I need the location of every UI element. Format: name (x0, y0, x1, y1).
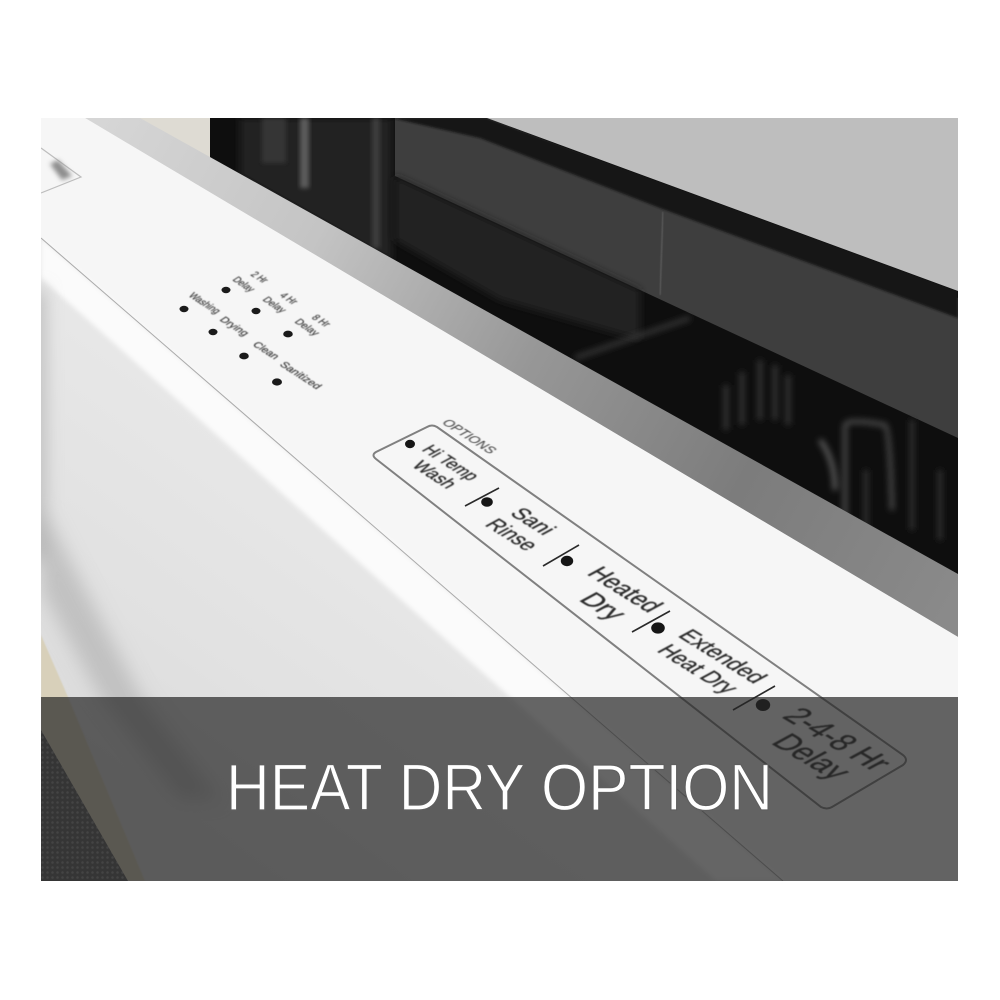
status labels: Clean (249, 340, 282, 361)
status labels: Sanitized (276, 360, 324, 391)
beige floor sliver (41, 635, 145, 881)
option dividers (465, 488, 775, 710)
option labels: Delay (763, 729, 861, 785)
status labels: Delay (229, 275, 258, 294)
product photo of dishwasher control panel (30, 118, 958, 881)
option dots (405, 440, 770, 711)
status labels: Drying (216, 315, 252, 338)
status dots (180, 287, 293, 386)
control panel white face (100, 126, 958, 637)
options button strip (374, 426, 906, 808)
option labels: 2-4-8 Hr (774, 703, 901, 776)
soft shadow streak on door (41, 286, 148, 697)
blurred dish rack tines (575, 318, 940, 540)
option labels: Extended (672, 626, 773, 687)
option labels: Dry (572, 589, 633, 624)
options heading: OPTIONS (438, 417, 501, 456)
beige wall behind door (140, 118, 210, 157)
infographic canvas (41, 118, 958, 881)
dark mesh kick plate (41, 730, 128, 881)
option labels: Hi Temp (417, 442, 484, 483)
options outline (374, 426, 906, 808)
status indicator cluster (180, 270, 333, 391)
gray upper door panel (487, 118, 958, 291)
status labels: Delay (259, 295, 289, 315)
lower door face (41, 239, 510, 880)
status labels: Delay (291, 317, 322, 338)
option labels: Wash (407, 458, 462, 491)
top-left rinse indicator box (41, 148, 81, 193)
option labels: Sani (504, 505, 561, 538)
status labels (185, 270, 333, 391)
option labels: Heated (580, 563, 669, 616)
status labels: Washing (185, 291, 223, 316)
white lip under control panel (41, 241, 570, 697)
upper rack band (395, 118, 958, 438)
title banner (41, 697, 958, 881)
stainless steel trim strip (85, 118, 958, 637)
status labels: 2 Hr (247, 270, 271, 285)
option labels (407, 442, 901, 785)
option labels: Heat Dry (651, 641, 745, 697)
option labels: Rinse (479, 516, 544, 554)
banner background (41, 697, 958, 881)
status labels: 8 Hr (308, 313, 333, 329)
dark dishwasher interior (210, 118, 958, 600)
status labels: 4 Hr (276, 291, 300, 307)
photo background: panel surface (41, 118, 958, 881)
title text: HEAT DRY OPTION (226, 750, 773, 824)
